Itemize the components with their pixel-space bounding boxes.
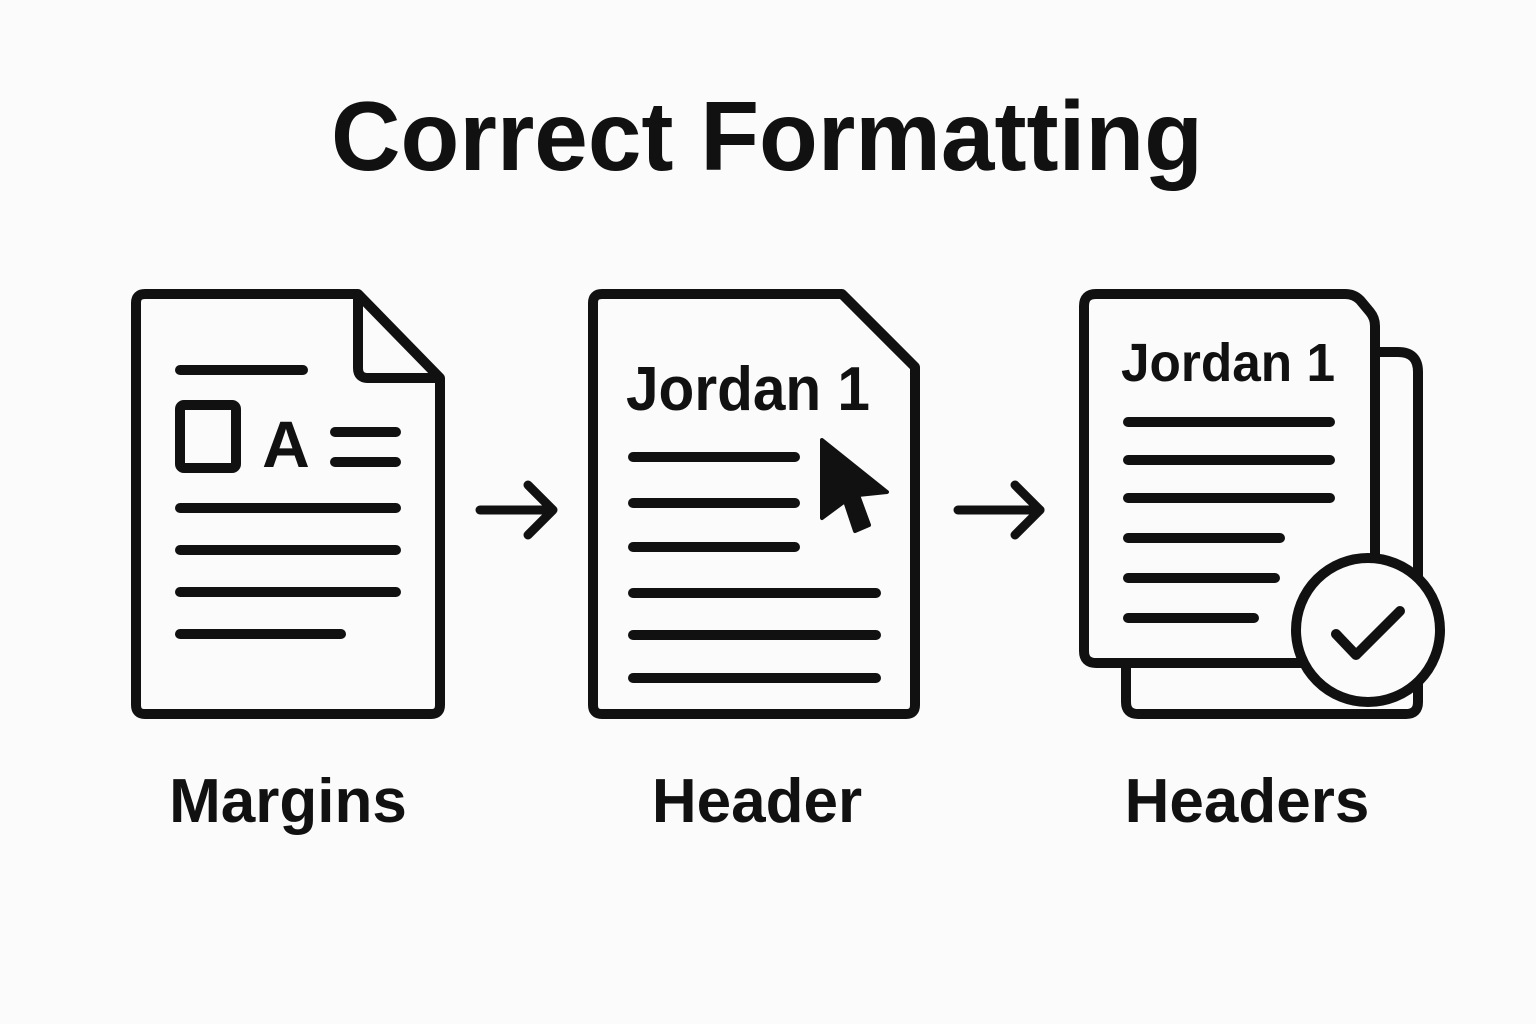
icon: check circle xyxy=(1296,558,1440,702)
panel: margins document xyxy=(136,294,440,714)
title: Correct Formatting xyxy=(331,81,1203,191)
arrow 2 xyxy=(958,485,1040,535)
icon: cursor xyxy=(822,440,887,531)
label: Margins: Margins xyxy=(169,767,407,836)
arrow 1 xyxy=(480,485,553,535)
icon: letter A: A xyxy=(262,407,310,481)
header text: Jordan 1 xyxy=(1121,333,1335,393)
panel: headers documents xyxy=(1084,294,1440,714)
label: Headers: Headers xyxy=(1125,767,1369,836)
panel: header document xyxy=(593,294,915,714)
label: Header: Header xyxy=(652,767,862,836)
header text: Jordan 1 xyxy=(626,355,870,424)
